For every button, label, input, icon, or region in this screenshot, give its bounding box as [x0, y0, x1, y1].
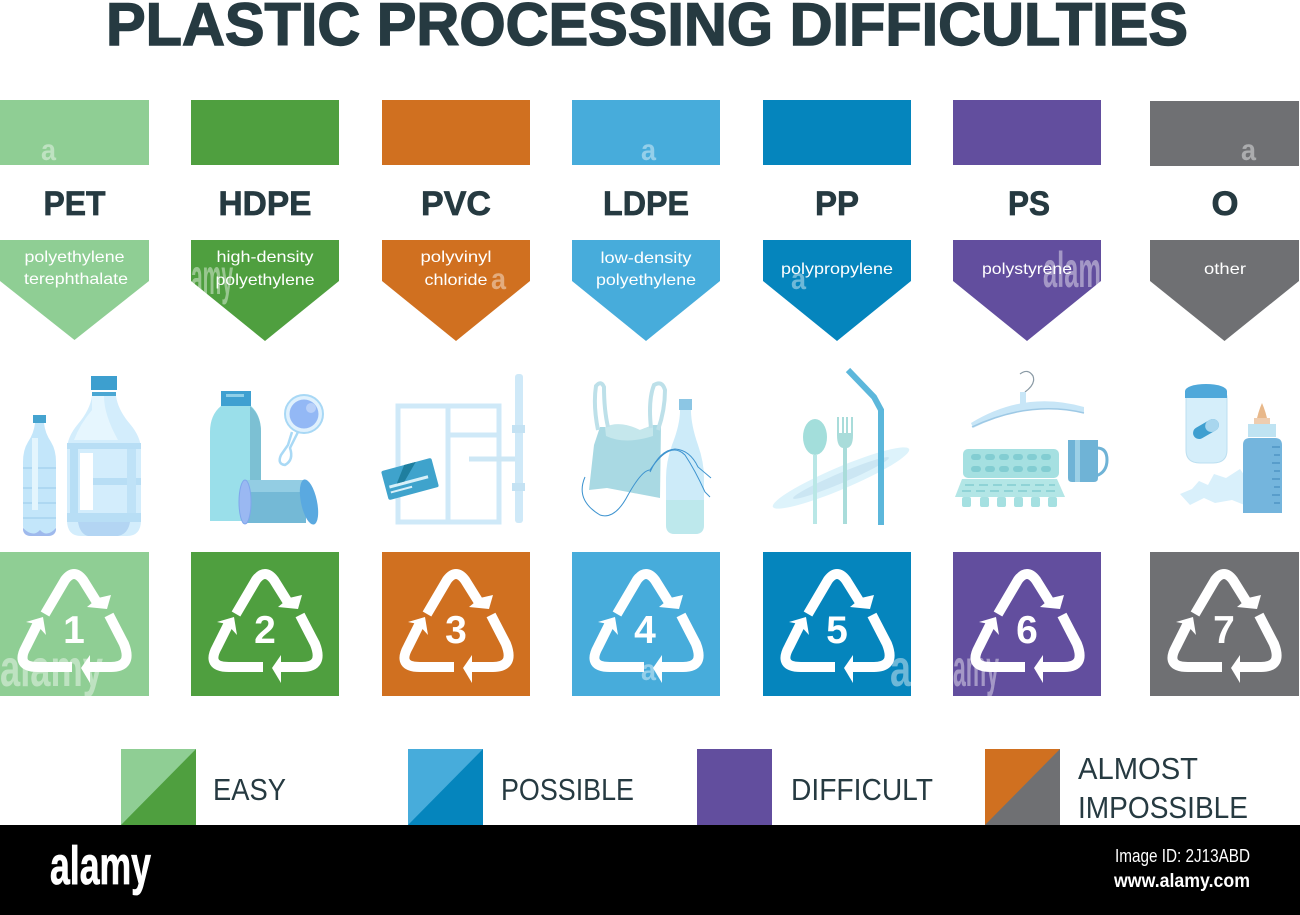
- recycling tile 5: 5: [826, 609, 848, 652]
- watermarks: a: [1241, 134, 1256, 167]
- illustration: LDPE items: [582, 383, 711, 534]
- watermarks: alam: [1043, 242, 1101, 298]
- tag: PET: polyethylene: [24, 249, 125, 266]
- recycling tile 6: [953, 552, 1101, 696]
- tag: PET: [0, 100, 149, 340]
- illustration: HDPE items: [210, 391, 323, 526]
- recycling tile 1: 1: [63, 609, 85, 652]
- tag: HDPE: polyethylene: [216, 272, 315, 289]
- watermarks: a: [791, 263, 806, 296]
- legend: possible: [408, 749, 634, 825]
- tag: LDPE: [572, 100, 720, 341]
- recycling tile 7: 7: [1213, 609, 1235, 652]
- legend: almost impossible: ALMOST: [1078, 751, 1198, 786]
- tag: PS: [953, 100, 1101, 341]
- watermarks: alamy: [0, 640, 103, 698]
- tag: PVC: chloride: [424, 272, 488, 289]
- recycling tile 4: [572, 552, 720, 696]
- tag: PVC: PVC: [421, 185, 491, 223]
- recycling tile 5: [763, 552, 911, 696]
- legend: almost impossible: [985, 749, 1248, 825]
- tag: PP: PP: [815, 185, 859, 223]
- tag: LDPE: polyethylene: [596, 272, 696, 289]
- tag: LDPE: low-density: [600, 250, 692, 267]
- tag: PP: polypropylene: [781, 261, 893, 278]
- footer logo: alamy: [50, 836, 151, 896]
- footer bar: [0, 825, 1300, 915]
- recycling tile 4: 4: [634, 609, 656, 652]
- legend: easy: [121, 749, 286, 825]
- watermarks: a: [890, 640, 912, 698]
- tag: HDPE: HDPE: [218, 185, 312, 223]
- watermarks: a: [641, 654, 656, 687]
- legend: possible: POSSIBLE: [501, 772, 634, 807]
- watermarks: amy: [191, 249, 233, 305]
- watermarks: [0, 134, 1256, 698]
- watermarks: a: [41, 134, 56, 167]
- footer website: www.alamy.com: [1113, 871, 1250, 892]
- tag: O: O: [1212, 185, 1238, 223]
- recycling tile 3: [382, 552, 530, 696]
- tag: PVC: polyvinyl: [420, 249, 492, 266]
- recycling tile 6: 6: [1016, 609, 1038, 652]
- watermarks: a: [491, 263, 506, 296]
- legend: easy: EASY: [213, 772, 286, 807]
- illustration: other items: [1180, 384, 1282, 513]
- footer image id: Image ID: 2J13ABD: [1115, 846, 1250, 866]
- tag: O: [1150, 101, 1299, 341]
- recycling tile 2: 2: [254, 609, 276, 652]
- legend: difficult: DIFFICULT: [791, 772, 933, 807]
- tag: PP: [763, 100, 911, 341]
- illustration: PP items: [769, 370, 913, 525]
- watermarks: a: [641, 134, 656, 167]
- legend: difficult: [697, 749, 933, 825]
- tag: LDPE: LDPE: [603, 185, 689, 223]
- illustration: PET bottles: [23, 376, 141, 536]
- tag: PS: polystyrene: [982, 261, 1072, 278]
- recycling tile 7: [1150, 552, 1299, 696]
- tag: PVC: [382, 100, 530, 341]
- watermarks: amy: [953, 640, 999, 698]
- tag: HDPE: high-density: [216, 249, 314, 266]
- illustration: PVC items: [381, 374, 525, 523]
- tag: PET: PET: [44, 185, 106, 223]
- recycling tile 3: 3: [445, 609, 467, 652]
- legend: almost impossible: IMPOSSIBLE: [1078, 790, 1248, 825]
- tag: PS: PS: [1008, 185, 1050, 223]
- tag: HDPE: [191, 100, 339, 341]
- recycling tile 2: [191, 552, 339, 696]
- tag: PET: terephthalate: [24, 271, 128, 288]
- illustration: PS items: [955, 371, 1107, 507]
- tag: O: other: [1204, 261, 1247, 278]
- recycling tile 1: [0, 552, 149, 696]
